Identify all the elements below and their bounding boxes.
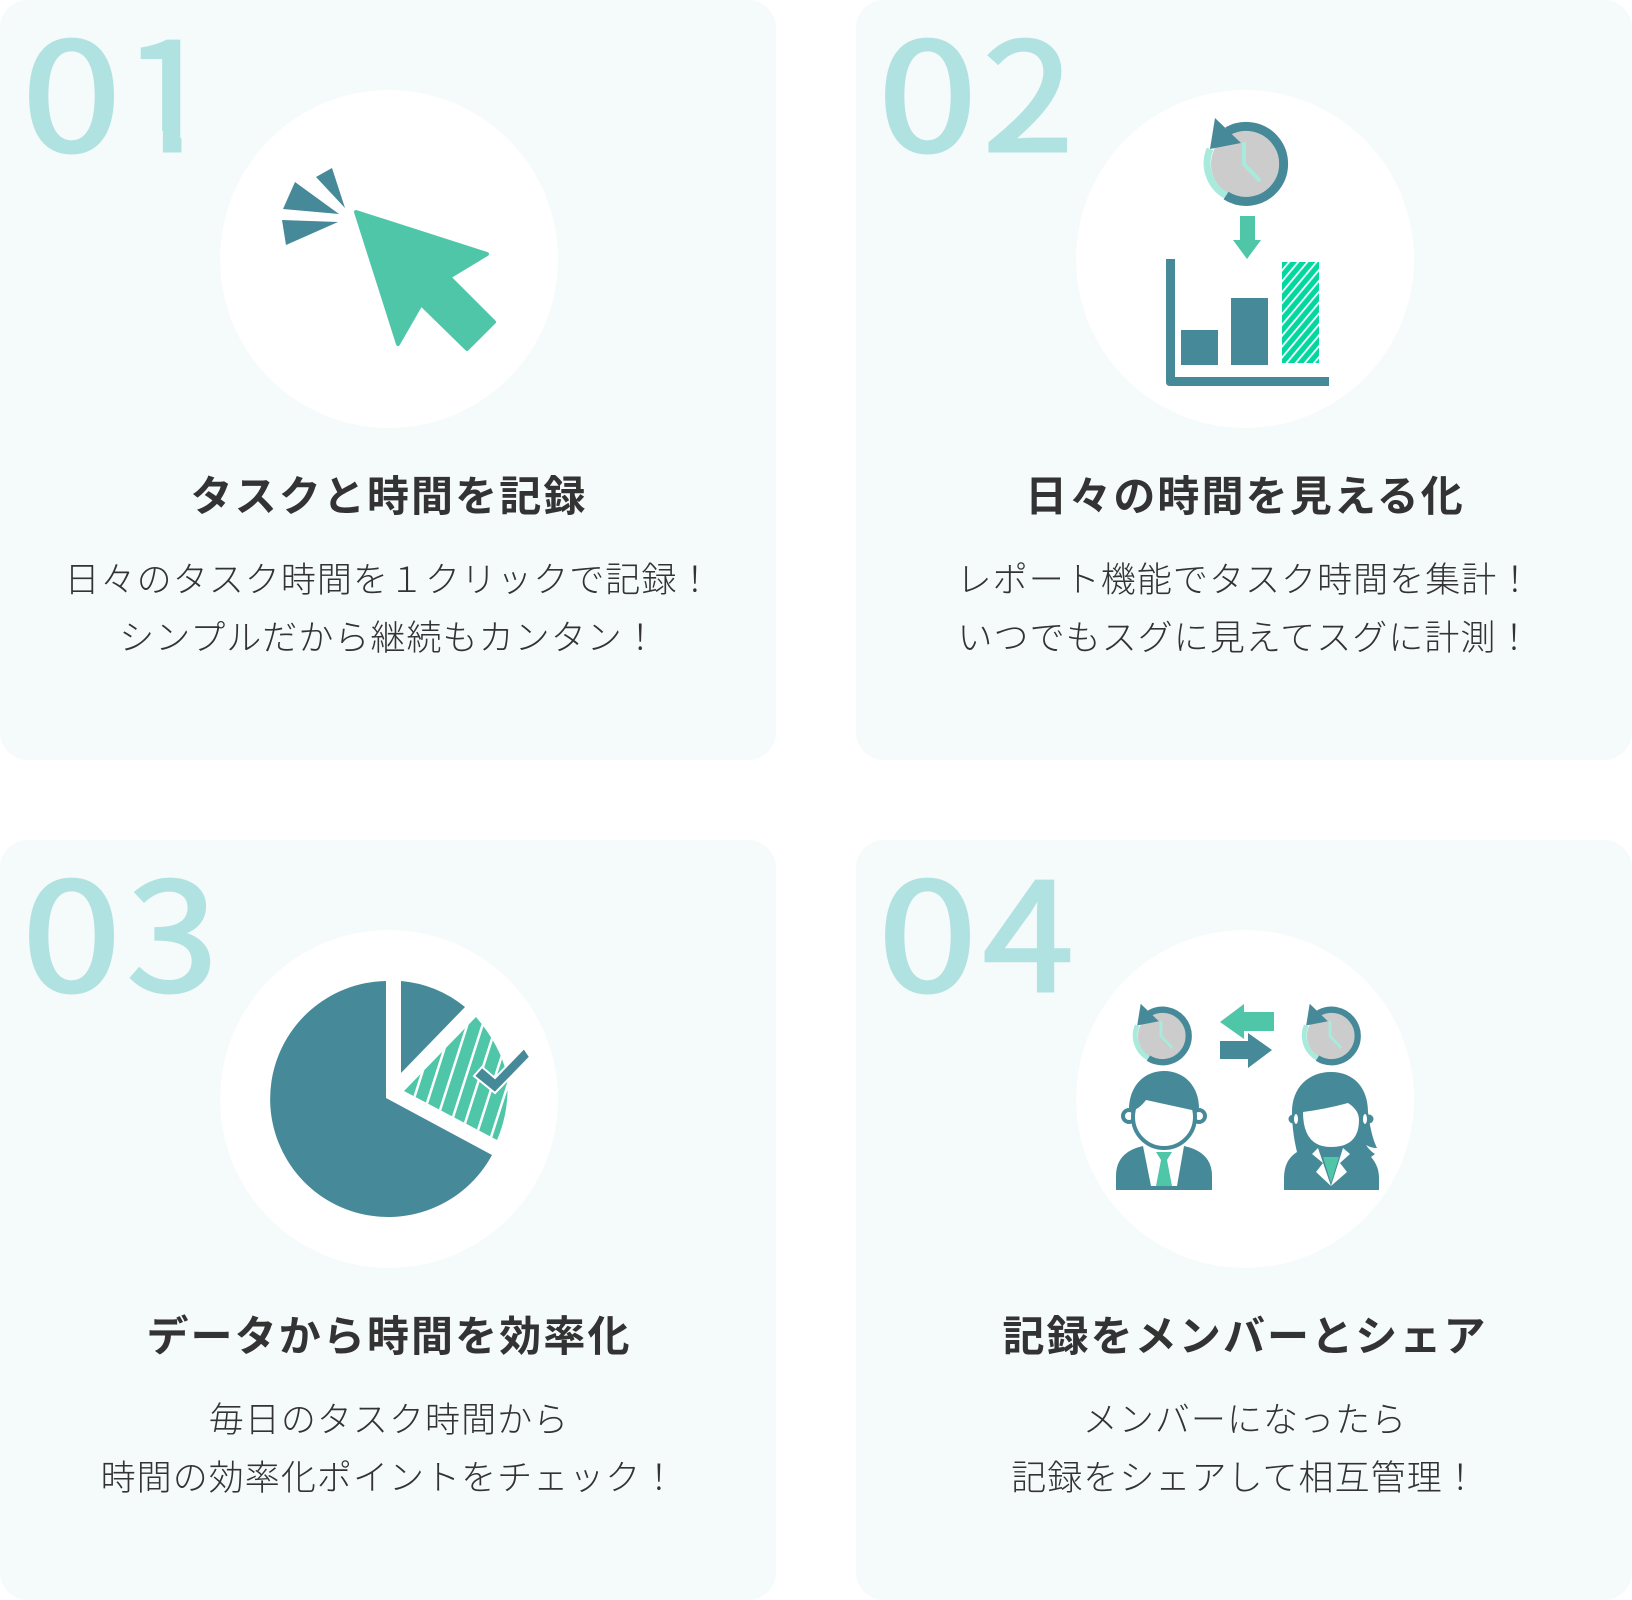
panel: 03 pie [0, 840, 776, 1600]
icon: clock right [1304, 1004, 1358, 1062]
panel: 02 visualize [856, 0, 1632, 760]
heading: データから時間を効率化 [146, 1303, 632, 1364]
heading: タスクと時間を記録 [191, 463, 587, 524]
icon: woman [1284, 1072, 1379, 1190]
number 03 [22, 840, 232, 1035]
icon: clock left [1135, 1004, 1189, 1062]
icon: clock and bar chart [1076, 90, 1414, 428]
number 02 [878, 0, 1088, 195]
heading: 記録をメンバーとシェア [1002, 1303, 1488, 1364]
number 04 [878, 840, 1088, 1035]
arrow right [1220, 1033, 1272, 1068]
text block: 毎日のタスク時間から [209, 1392, 569, 1443]
icon: cursor click [220, 90, 558, 428]
text block [957, 552, 1533, 661]
text block: 日々のタスク時間を１クリックで記録！ [65, 552, 713, 603]
text block: メンバーになったら [1083, 1392, 1407, 1443]
text block: 時間の効率化ポイントをチェック！ [101, 1450, 677, 1501]
text block [65, 552, 713, 661]
text block: レポート機能でタスク時間を集計！ [957, 552, 1533, 603]
icon: pie chart with check [220, 930, 558, 1268]
panel: 04 share [856, 840, 1632, 1600]
text block [101, 1392, 677, 1501]
icon: two members sharing [1076, 930, 1414, 1268]
text block: 記録をシェアして相互管理！ [1011, 1450, 1479, 1501]
text block: いつでもスグに見えてスグに計測！ [957, 610, 1533, 661]
arrow left [1220, 1004, 1274, 1039]
text block: シンプルだから継続もカンタン！ [119, 610, 659, 661]
heading: 日々の時間を見える化 [1025, 463, 1465, 524]
text block [1011, 1392, 1479, 1501]
panel: 01 record [0, 0, 776, 760]
icon: man [1116, 1071, 1212, 1190]
